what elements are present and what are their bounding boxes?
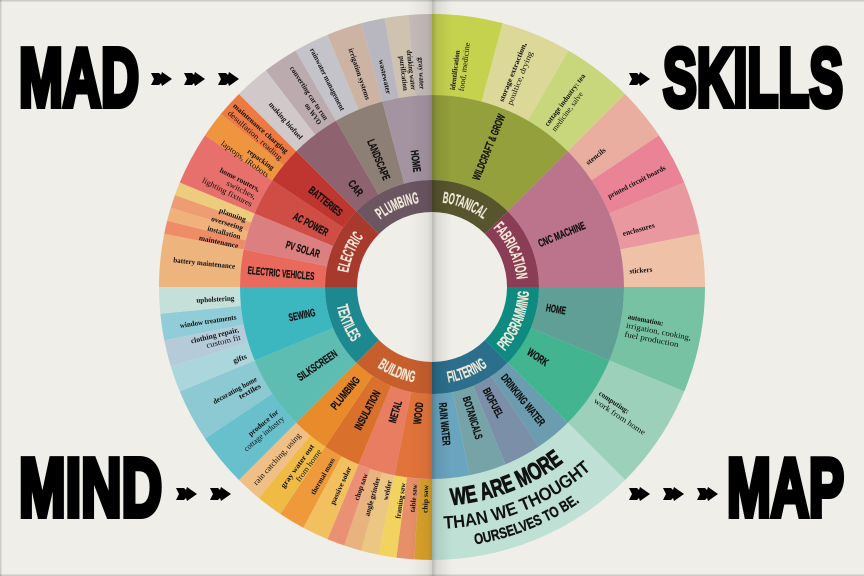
label: drinking water purification: purification	[397, 55, 410, 92]
label: home routers, switches, lighting fixtures: switches,	[225, 179, 258, 201]
panel: plumbing	[239, 14, 432, 234]
label: stencils: stencils	[584, 146, 608, 167]
label: SEWING: SEWING	[288, 307, 317, 324]
segment: plumbing	[296, 363, 373, 447]
segment: automation	[609, 287, 705, 391]
arrows: after MAD	[151, 72, 239, 86]
label: TEXTILES: TEXTILES	[337, 303, 361, 342]
segment: rain catching	[239, 423, 310, 498]
label: converting car: on WVO	[303, 101, 324, 126]
segment: sewing	[240, 287, 333, 360]
segment: maintenance charging	[221, 94, 296, 165]
label: gray water: from home	[294, 447, 324, 484]
label: BOTANICALS: BOTANICALS	[460, 395, 484, 441]
label: automation: irrigation, cooking,	[625, 321, 692, 342]
label: HOME: HOME	[408, 149, 422, 173]
band: plumbing	[356, 180, 432, 234]
label: maintenance charging: maintenance charging	[231, 101, 290, 155]
segment: rain water	[432, 392, 469, 479]
label: BUILDING: BUILDING	[378, 358, 416, 382]
label: gifts: gifts	[232, 352, 248, 365]
panel: botanical	[432, 14, 625, 234]
segment: chop saw	[328, 464, 370, 546]
label: BIOFUEL: BIOFUEL	[480, 386, 506, 420]
band: textiles	[325, 287, 379, 363]
label: storage extraction: poultice, drying	[505, 50, 535, 106]
segment: converting car	[266, 51, 336, 135]
segment: battery maintenance	[159, 234, 244, 287]
band: building	[356, 340, 432, 394]
segment: pv solar	[244, 214, 333, 266]
label: HOME: HOME	[545, 302, 567, 318]
panel: electric	[159, 94, 379, 287]
panel: building	[239, 340, 432, 560]
segment: decorating home textiles	[180, 360, 272, 439]
segment: work	[508, 328, 609, 423]
callout: we are more than we thought ourselves to be: WE ARE MORE	[448, 448, 564, 506]
segment: table saw	[396, 477, 419, 559]
label: cottage industry: cottage industry: tea	[543, 72, 587, 128]
segment: enclosures	[609, 183, 700, 250]
segment: drinking water purification	[385, 15, 415, 98]
segment: cnc machine	[508, 151, 624, 287]
label: home routers, switches, lighting fixtures: lighting fixtures	[201, 176, 254, 209]
segment: botanicals	[453, 386, 505, 475]
label: PROGRAMMING: PROGRAMMING	[496, 291, 530, 351]
label: INSULATION: INSULATION	[353, 389, 383, 432]
label: METAL: METAL	[387, 399, 405, 425]
label: converting car: converting car to run	[288, 64, 331, 123]
segment: irrigation systems	[328, 23, 382, 110]
label: identification: food, medicine	[457, 41, 472, 92]
band: fabrication	[485, 211, 539, 287]
segment: metal	[359, 386, 411, 475]
segment: welder	[361, 472, 395, 555]
label: repacking: laptops, iRobots	[219, 139, 271, 179]
band: electric	[325, 211, 379, 287]
title: MAD: MAD	[19, 31, 139, 124]
segment: stencils	[568, 94, 659, 180]
segment: electric vehicles	[240, 250, 327, 287]
label: overseeing: overseeing	[210, 214, 245, 232]
callout: we are more than we thought ourselves to be: OURSELVES TO BE.	[474, 496, 580, 544]
panel: textiles	[159, 287, 379, 480]
label: installation: installation	[206, 224, 242, 241]
segment: home	[382, 95, 432, 184]
label: produce for cottage industry: cottage industry	[242, 414, 286, 453]
label: upholstering: upholstering	[196, 294, 235, 305]
label: CAR: CAR	[345, 178, 365, 199]
segment: cottage industry	[528, 51, 625, 151]
segment: silkscreen	[255, 328, 356, 423]
segment: thermal mass	[280, 447, 341, 528]
segment: gifts	[171, 343, 255, 391]
label: wastewater: wastewater	[377, 59, 393, 95]
label: storage extraction	[497, 41, 537, 106]
label: window treatments: window treatments	[179, 312, 237, 330]
label: FABRICATION: FABRICATION	[493, 220, 528, 280]
segment: ac power	[255, 180, 343, 246]
label: table saw: table saw	[408, 483, 419, 513]
label: maintenance charging: desulfation, reading	[226, 109, 284, 162]
label: printed circuit boards: printed circuit boards	[606, 163, 667, 200]
label: WOOD: WOOD	[412, 402, 426, 425]
callout segment: we are more	[432, 423, 625, 560]
label: computing	[592, 389, 653, 437]
label: maintenance: maintenance	[198, 233, 240, 250]
label: passive solar: passive solar	[328, 464, 354, 506]
segment: window treatments	[160, 306, 244, 340]
segment: storage extraction	[482, 23, 568, 121]
segment: maintenance	[164, 221, 246, 250]
segment: wood	[395, 392, 432, 479]
segment: chip saw	[414, 479, 432, 560]
label: gray water: gray water	[416, 57, 427, 90]
label: PV SOLAR: PV SOLAR	[284, 239, 321, 261]
segment: car	[296, 121, 378, 211]
label: cottage industry: medicine, salve	[550, 90, 585, 133]
label: identification	[448, 40, 472, 92]
callout: we are more than we thought ourselves to be: THAN WE THOUGHT	[443, 460, 588, 528]
segment: produce for cottage industry	[205, 394, 296, 480]
label: PLUMBING: PLUMBING	[374, 192, 419, 220]
label: WORK: WORK	[525, 346, 550, 369]
segment: batteries	[272, 151, 356, 228]
band: filtering	[432, 340, 508, 394]
label: battery maintenance: battery maintenance	[173, 255, 236, 271]
label: LANDSCAPE: LANDSCAPE	[364, 138, 392, 182]
segment: computing	[568, 360, 684, 480]
segment: passive solar	[303, 456, 359, 539]
label: planning: planning	[218, 206, 248, 224]
label: drinking water purification: drinking water	[405, 50, 418, 91]
label: angle grinder: angle grinder	[362, 476, 382, 517]
segment: overseeing	[171, 195, 251, 231]
segment: printed circuit boards	[592, 135, 684, 214]
label: AC POWER: AC POWER	[291, 211, 330, 239]
band: botanical	[432, 180, 508, 234]
label: computing: computing:	[597, 389, 631, 416]
segment: gray water	[408, 14, 432, 96]
segment: home routers and lighting	[180, 135, 272, 214]
label: making biofuel: making biofuel	[267, 100, 305, 141]
segment: stickers	[620, 234, 705, 287]
label: PLUMBING: PLUMBING	[329, 375, 363, 412]
label: clothing repair	[190, 325, 242, 353]
segment: biofuel	[473, 376, 539, 464]
segment: planning	[175, 183, 255, 222]
chart: skills wheel	[159, 14, 705, 560]
segment: wastewater	[361, 18, 399, 102]
segment: insulation	[325, 376, 391, 464]
label: chip saw: chip saw	[420, 484, 430, 513]
label: home routers, switches, lighting fixtures: home routers,	[218, 166, 262, 194]
label: clothing repair: custom fit	[205, 333, 242, 350]
label: framing saw: framing saw	[393, 482, 408, 519]
segment: identification	[432, 14, 503, 102]
label: home routers, switches, lighting fixtures	[201, 161, 262, 209]
label: welder: welder	[381, 479, 394, 501]
label: rainwater management: rainwater management	[308, 46, 347, 113]
label: decorating home textiles: textiles	[237, 381, 262, 401]
label: RAIN WATER: RAIN WATER	[436, 402, 452, 446]
label: clothing repair: clothing repair,	[190, 325, 240, 345]
label: enclosures: enclosures	[621, 221, 656, 238]
segment: installation	[167, 208, 248, 240]
label: SILKSCREEN: SILKSCREEN	[295, 348, 340, 384]
label: automation: automation:	[627, 312, 664, 328]
segment: angle grinder	[344, 469, 382, 551]
label: gray water: gray water out	[278, 442, 317, 490]
label: BOTANICAL: BOTANICAL	[442, 192, 488, 220]
label: ELECTRIC: ELECTRIC	[337, 232, 363, 272]
label: stickers: stickers	[629, 265, 653, 276]
band: programming	[485, 287, 539, 363]
label: produce for cottage industry: produce for	[246, 407, 281, 438]
panel: filtering	[432, 340, 625, 560]
segment: gray water	[259, 435, 325, 514]
segment: upholstering	[159, 287, 241, 314]
segment: making biofuel	[239, 70, 315, 151]
segment: landscape	[336, 102, 404, 194]
arrow: before SKILLS	[629, 72, 650, 86]
label: drinking water purification	[397, 50, 418, 92]
label: automation	[624, 312, 694, 351]
label: chop saw: chop saw	[352, 472, 370, 501]
arrows: before MAP	[629, 487, 718, 501]
label: decorating home textiles: decorating home	[211, 374, 259, 406]
label: ELECTRIC VEHICLES: ELECTRIC VEHICLES	[247, 265, 315, 283]
panel: programming	[485, 287, 705, 480]
label: CNC MACHINE: CNC MACHINE	[537, 220, 587, 250]
label: BATTERIES: BATTERIES	[306, 185, 345, 219]
label: repacking: repacking	[246, 147, 276, 172]
segment: repacking	[205, 114, 284, 180]
segment: wildcraft and grow	[432, 95, 568, 211]
label: thermal mass: thermal mass	[309, 456, 337, 496]
label: automation: fuel production	[624, 330, 679, 349]
arrows: after MIND	[176, 487, 231, 501]
segment: drinking water	[491, 363, 568, 447]
segment: clothing repair	[164, 324, 248, 366]
label: storage extraction: storage extraction,	[497, 41, 529, 103]
label: gray water	[278, 442, 324, 495]
label: rain catching: rain catching, using	[251, 431, 303, 487]
label: identification: identification	[448, 49, 462, 91]
label: DRINKING WATER: DRINKING WATER	[498, 372, 547, 429]
title: MIND: MIND	[19, 441, 162, 534]
segment: rainwater management	[296, 35, 359, 121]
label: irrigation systems: irrigation systems	[347, 47, 372, 101]
label: WILDCRAFT & GROW: WILDCRAFT & GROW	[471, 112, 508, 182]
segment: framing saw	[379, 475, 407, 558]
label: FILTERING: FILTERING	[446, 358, 486, 383]
label: computing: work from home	[592, 396, 648, 437]
label: repacking	[219, 132, 276, 179]
panel: fabrication	[485, 94, 705, 287]
segment: home	[531, 287, 624, 360]
